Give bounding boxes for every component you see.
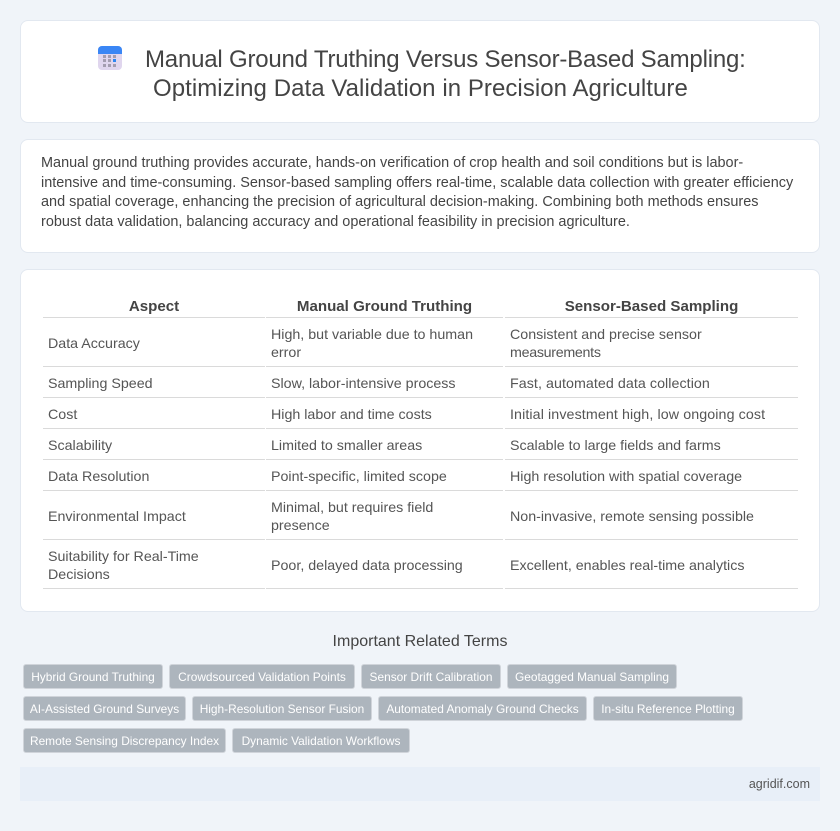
comparison table panel [20,269,820,612]
tag: Hybrid Ground Truthing [31,670,155,684]
comparison table [43,298,798,589]
title [145,46,746,102]
comparison table: Slow, labor-intensive process [271,376,456,392]
row: suitability for real-time decisions [48,549,199,583]
tag: Remote Sensing Discrepancy Index [30,734,219,748]
related terms heading: Important Related Terms [333,633,507,650]
tag: High-Resolution Sensor Fusion [200,702,364,716]
tag: In-situ Reference Plotting [601,702,735,716]
comparison table: Initial investment high, low ongoing cost [510,407,765,423]
comparison table: Fast, automated data collection [510,376,710,392]
comparison table: Poor, delayed data processing [271,558,463,574]
comparison table: Minimal, but requires field [271,500,433,516]
icon: calendar grid [98,46,122,70]
row: scalability: Scalability [48,438,112,454]
tag [23,728,226,753]
intro paragraph: and spatial coverage, enhancing the precision of agricultural decision-making. Combining both methods ensures [41,194,758,210]
footer site name: agridif.com [749,777,810,791]
row: data accuracy: Data Accuracy [48,336,140,352]
comparison table: High resolution with spatial coverage [510,469,742,485]
row: sampling speed: Sampling Speed [48,376,153,392]
footer bar [20,767,820,801]
header: sensor-based sampling: Sensor-Based Sampling [565,298,738,315]
tag [593,696,743,721]
comparison table: High, but variable due to human [271,327,473,343]
title: Manual Ground Truthing Versus Sensor-Based Sampling: [145,46,746,73]
comparison table: measurements [510,345,601,361]
comparison table: presence [271,518,330,534]
row: environmental impact: Environmental Impact [48,509,186,525]
header: manual ground truthing: Manual Ground Truthing [297,298,472,315]
row: suitability for real-time decisions: Decisions [48,567,110,583]
tag: Automated Anomaly Ground Checks [386,702,579,716]
tag [507,664,677,689]
tag [232,728,410,753]
row: data resolution: Data Resolution [48,469,149,485]
intro text panel [20,139,820,253]
comparison table: Limited to smaller areas [271,438,422,454]
tag [378,696,587,721]
intro paragraph [41,155,794,230]
comparison table: Excellent, enables real-time analytics [510,558,744,574]
comparison table: Point-specific, limited scope [271,469,447,485]
row: cost: Cost [48,407,77,423]
tag: Geotagged Manual Sampling [515,670,669,684]
tag: AI-Assisted Ground Surveys [30,702,179,716]
tag [23,664,163,689]
tag: Crowdsourced Validation Points [178,670,346,684]
related terms tags [23,664,743,753]
tag [192,696,372,721]
tag: Dynamic Validation Workflows [242,734,400,748]
tag [169,664,355,689]
comparison table: Non-invasive, remote sensing possible [510,509,754,525]
comparison table: High labor and time costs [271,407,432,423]
title: Optimizing Data Validation in Precision Agriculture [153,75,688,102]
tag [361,664,501,689]
intro paragraph: intensive and time-consuming. Sensor-based sampling offers real-time, scalable data collection with greater efficiency [41,175,793,191]
header panel [20,20,820,123]
header: aspect: Aspect [129,298,179,315]
intro paragraph: robust data validation, balancing accuracy and operational feasibility in precision agriculture. [41,214,630,230]
tag: Sensor Drift Calibration [370,670,492,684]
intro paragraph: Manual ground truthing provides accurate, hands-on verification of crop health and soil conditions but is labor- [41,155,743,171]
comparison table: error [271,345,301,361]
tag [23,696,186,721]
comparison table: Scalable to large fields and farms [510,438,721,454]
comparison table: Consistent and precise sensor [510,327,702,343]
row: suitability for real-time decisions: Suitability for Real-Time [48,549,199,565]
